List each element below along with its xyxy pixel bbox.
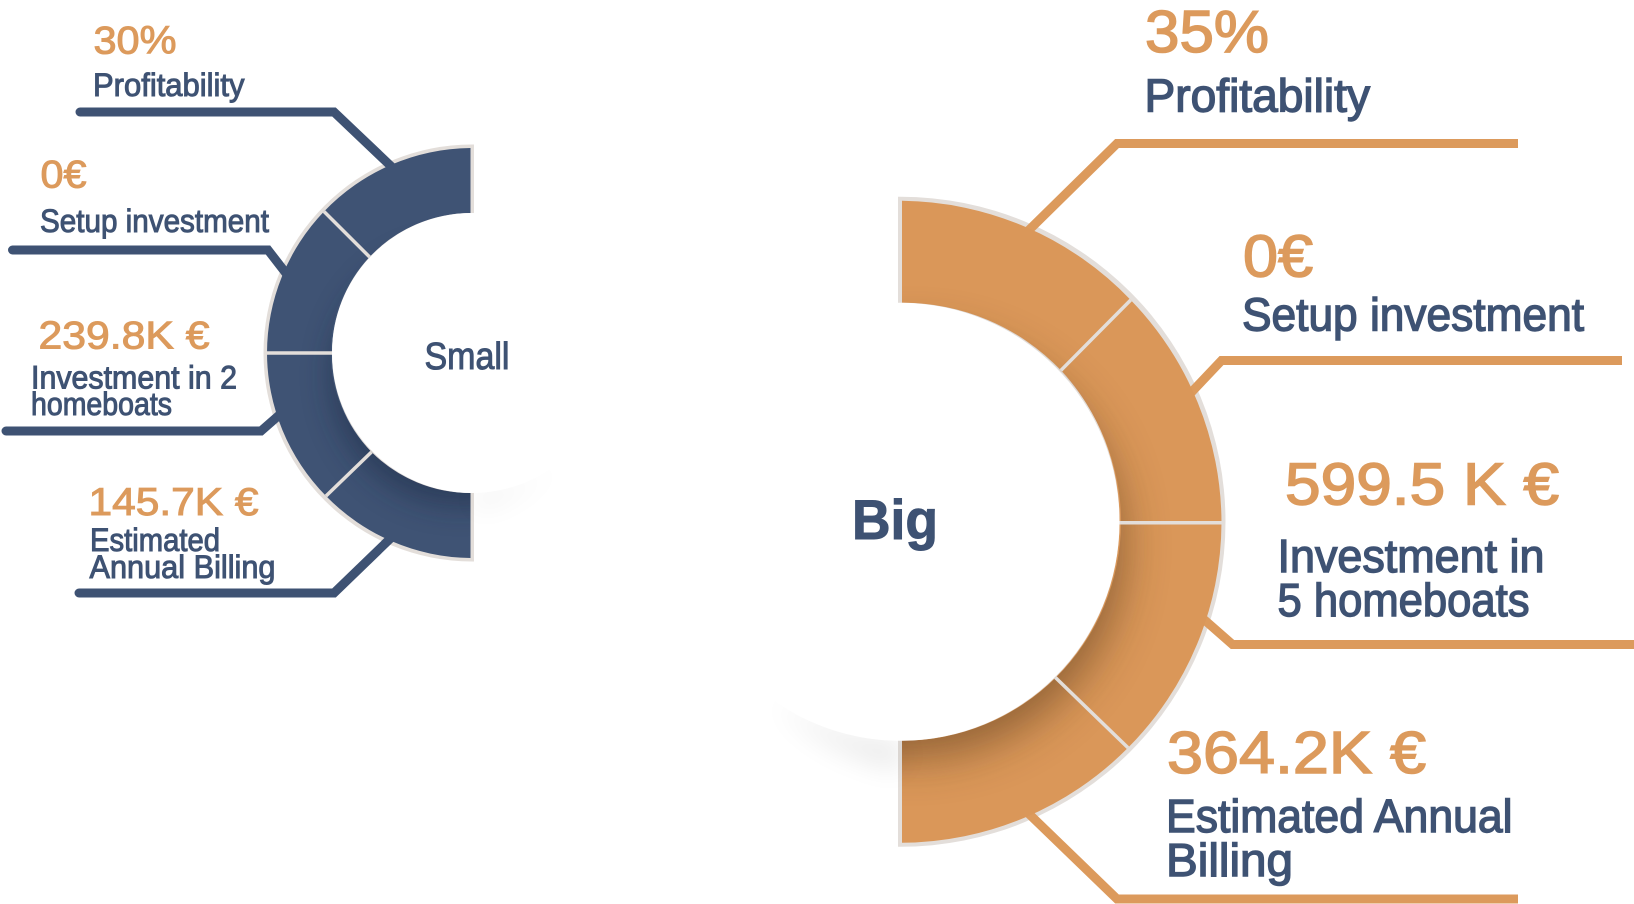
center disc: big (682, 303, 1120, 741)
leader line: big investment (1200, 616, 1634, 644)
segment: small profitability (324, 148, 470, 257)
segment: big setup investment (1061, 300, 1222, 523)
label: homeboats: homeboats (31, 386, 172, 422)
segment: big profitability (902, 201, 1131, 370)
value: 30%: 30% (94, 20, 176, 62)
ring: big (902, 201, 1222, 843)
ring shadow: small (324, 326, 470, 513)
label: Setup investment: Setup investment (40, 203, 269, 239)
label: Estimated Annual: Estimated Annual (1166, 790, 1512, 842)
big labels (1144, 0, 1584, 886)
center disc: small (332, 213, 612, 493)
value: 145.7K €: 145.7K € (88, 481, 259, 524)
label: Annual Billing: Annual Billing (90, 549, 276, 585)
label: Profitability: Profitability (1144, 69, 1370, 121)
small labels (31, 20, 276, 585)
ring outline: big (898, 196, 1226, 847)
leader line: big setup investment (1186, 360, 1622, 398)
center label: Big: Big (852, 488, 938, 551)
label: Estimated: Estimated (90, 522, 220, 558)
value: 364.2K €: 364.2K € (1167, 720, 1426, 786)
small chart (2, 108, 508, 598)
separators: small (267, 212, 372, 496)
big chart (828, 139, 1634, 904)
leader line: small billing (79, 534, 395, 593)
segment: small investment (267, 353, 372, 496)
segment: big investment (1055, 523, 1222, 748)
leader line: small profitability (80, 112, 395, 170)
value: 0€: 0€ (40, 154, 87, 196)
label: Profitability: Profitability (93, 67, 244, 103)
value: 239.8K €: 239.8K € (38, 314, 210, 358)
leader line: big profitability (1027, 144, 1518, 232)
leader line: big billing (1027, 812, 1518, 899)
ring: small (267, 148, 470, 558)
leader line: small setup investment (12, 250, 292, 281)
segment: small setup investment (267, 212, 370, 353)
value: 35%: 35% (1145, 0, 1269, 65)
segment: small billing (326, 452, 470, 558)
value: 599.5 K €: 599.5 K € (1285, 452, 1559, 518)
leader line: small investment (6, 410, 285, 431)
label: Billing: Billing (1166, 834, 1293, 886)
separators: big (1055, 300, 1222, 748)
ring outline: small (264, 144, 474, 562)
center disc shadow: big (775, 700, 902, 770)
label: Investment in 2: Investment in 2 (31, 360, 237, 396)
value: 0€: 0€ (1243, 224, 1313, 290)
center label: Small: Small (424, 336, 510, 378)
label: Setup investment: Setup investment (1242, 288, 1584, 340)
center disc shadow: small (474, 458, 568, 508)
label: 5 homeboats: 5 homeboats (1278, 574, 1530, 626)
ring shadow: big (902, 316, 1148, 782)
segment: big billing (902, 678, 1128, 843)
label: Investment in: Investment in (1278, 530, 1544, 582)
